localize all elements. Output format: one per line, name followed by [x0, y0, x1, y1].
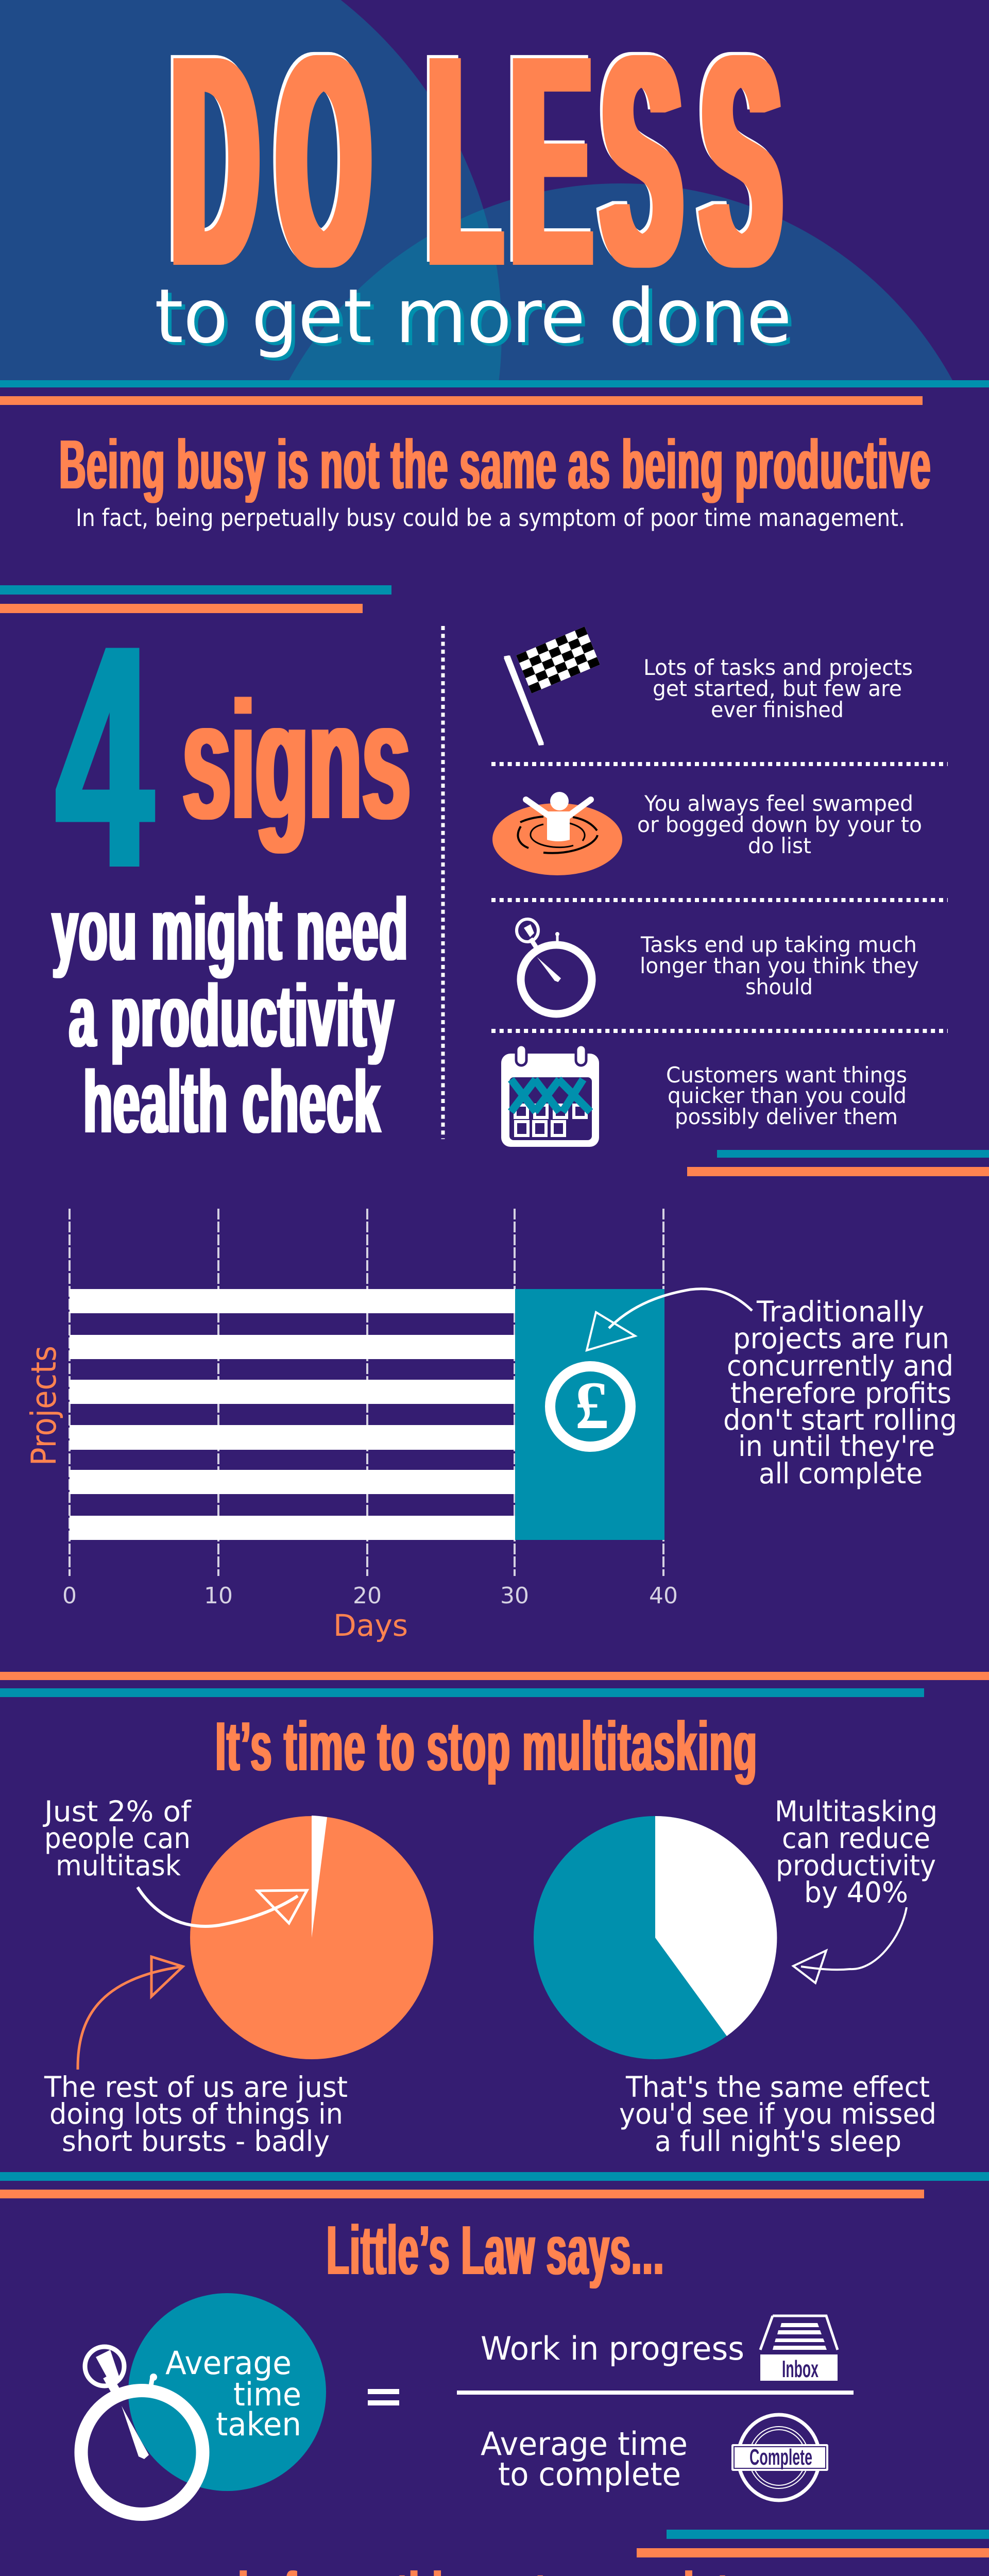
project bars — [70, 1289, 516, 1540]
section bars: signs — [0, 585, 391, 613]
sign 4 text: possibly deliver them — [675, 1104, 898, 1129]
equals sign — [368, 2389, 399, 2405]
text: you might need a productivity health check: you might need — [52, 880, 408, 979]
equation: left side — [81, 2293, 326, 2514]
icon: person swamped — [492, 792, 622, 875]
callout: multitasking reduces productivity: productivity — [776, 1849, 936, 1882]
axis title: Days: Days — [333, 1608, 408, 1643]
chart 1 callout: don't start rolling — [723, 1403, 957, 1436]
sign 1 text — [643, 655, 913, 722]
axis title: Projects: Projects — [24, 1346, 64, 1466]
chart 1 callout: Traditionally — [756, 1295, 924, 1328]
sign 3 text: longer than you think they — [640, 953, 919, 978]
denominator — [481, 2425, 688, 2493]
chart 1 callout: in until they're — [738, 1430, 935, 1463]
sign 3 text — [640, 932, 919, 999]
callout: just 2%: multitask — [56, 1849, 181, 1882]
axis numbers: 20 — [353, 1583, 382, 1609]
icon: checkered flag — [504, 626, 600, 745]
sign 2 text: do list — [748, 833, 811, 858]
panel: 4 signs heading — [52, 579, 411, 1151]
arrow: to white slice — [138, 1887, 307, 1926]
section bars: multitasking — [0, 1672, 989, 1697]
axis numbers — [62, 1583, 678, 1609]
word: signs: signs — [182, 667, 411, 855]
callout: the rest of us: short bursts - badly — [62, 2125, 330, 2158]
fraction bar — [457, 2391, 854, 2395]
sign 3 text: should — [745, 974, 813, 999]
callout: the rest of us — [44, 2071, 348, 2158]
callout: multitasking reduces productivity: by 40% — [804, 1876, 908, 1909]
icon: large stopwatch — [81, 2347, 203, 2514]
icon: inbox — [760, 2316, 838, 2382]
sign 1 text: Lots of tasks and projects — [643, 655, 913, 680]
text: you might need a productivity health check — [52, 880, 408, 1151]
text: average time taken — [165, 2344, 301, 2443]
callout: multitasking reduces productivity: can reduce — [782, 1822, 930, 1855]
chart: concurrent projects — [24, 1209, 678, 1643]
intro sentence: In fact, being perpetually busy could be a symptom of poor time management. — [76, 504, 905, 532]
chart 1 callout: therefore profits — [730, 1377, 951, 1410]
pie chart: 40 percent — [534, 1816, 777, 2059]
icon: pound coin — [550, 1366, 630, 1447]
callout: multitasking reduces productivity — [775, 1795, 937, 1909]
callout: missed sleep: a full night's sleep — [655, 2125, 901, 2158]
chart 1 callout: concurrently and — [727, 1349, 953, 1382]
horizontal dotted dividers — [491, 764, 948, 1031]
arrow to revenue — [587, 1289, 752, 1350]
teal circle — [128, 2293, 326, 2491]
sign 4 text: Customers want things — [666, 1062, 907, 1088]
chart 1 callout: all complete — [759, 1457, 923, 1490]
sign 2 text: or bogged down by your to — [637, 812, 922, 837]
chart 1 callout — [723, 1295, 957, 1490]
icon: pound coin: £ — [575, 1367, 609, 1443]
denominator: to complete — [498, 2455, 681, 2493]
text: average time taken: taken — [216, 2405, 301, 2443]
callout: missed sleep: you'd see if you missed — [619, 2097, 936, 2130]
header divider bars — [0, 380, 989, 405]
pie chart: 2 percent — [190, 1816, 433, 2059]
icon: complete stamp: Complete — [749, 2445, 812, 2470]
text: you might need a productivity health check: health check — [83, 1053, 381, 1151]
section bars: fewer things — [637, 2530, 989, 2557]
sign 1 text: get started, but few are — [653, 676, 902, 701]
icon: inbox: Inbox — [782, 2355, 819, 2382]
callout: missed sleep — [619, 2071, 936, 2158]
icon: complete stamp — [731, 2415, 828, 2500]
vertical dotted divider — [441, 626, 445, 1139]
callout: just 2% — [43, 1795, 192, 1882]
equation: fraction — [457, 2316, 854, 2500]
denominator: Average time — [481, 2425, 688, 2463]
sign 1 text: ever finished — [711, 697, 844, 722]
text: average time taken: Average — [165, 2344, 292, 2382]
revenue block — [515, 1289, 664, 1540]
heading: Little's Law: Little’s Law says... — [327, 2211, 664, 2289]
sign 2 text — [637, 791, 922, 858]
text: average time taken: time — [233, 2376, 301, 2413]
text: you might need a productivity health check: a productivity — [69, 967, 395, 1065]
callout: just 2%: people can — [44, 1822, 191, 1855]
big number 4: 4 — [57, 579, 154, 934]
axis numbers: 30 — [500, 1583, 529, 1609]
callout: the rest of us: doing lots of things in — [49, 2097, 343, 2130]
axis numbers: 10 — [204, 1583, 233, 1609]
callout: the rest of us: The rest of us are just — [44, 2071, 348, 2104]
numerator: Work in progress — [481, 2330, 744, 2367]
arrow: to 40 percent slice — [793, 1907, 907, 1983]
chart 1 callout: projects are run — [733, 1322, 949, 1355]
arrow: to orange pie — [78, 1957, 183, 2070]
icon: stopwatch — [517, 919, 592, 1014]
sign 4 text — [666, 1062, 907, 1129]
header background circles — [0, 0, 952, 380]
section bars: chart 1 — [687, 1150, 989, 1176]
sign 2 text: You always feel swamped — [644, 791, 913, 816]
callout: just 2%: Just 2% of — [43, 1795, 192, 1828]
sign 3 text: Tasks end up taking much — [640, 932, 917, 957]
title — [155, 0, 792, 360]
axis numbers: 0 — [62, 1583, 77, 1609]
icon: calendar — [501, 1045, 599, 1147]
section bars: little's law — [0, 2172, 989, 2198]
sign 4 text: quicker than you could — [668, 1083, 907, 1108]
subtitle: to get more done: to get more done — [155, 273, 792, 360]
title: DO LESS: DO LESS — [173, 0, 780, 329]
callout: missed sleep: That's the same effect — [625, 2071, 930, 2104]
callout: multitasking reduces productivity: Multitasking — [775, 1795, 937, 1828]
axis numbers: 40 — [649, 1583, 678, 1609]
